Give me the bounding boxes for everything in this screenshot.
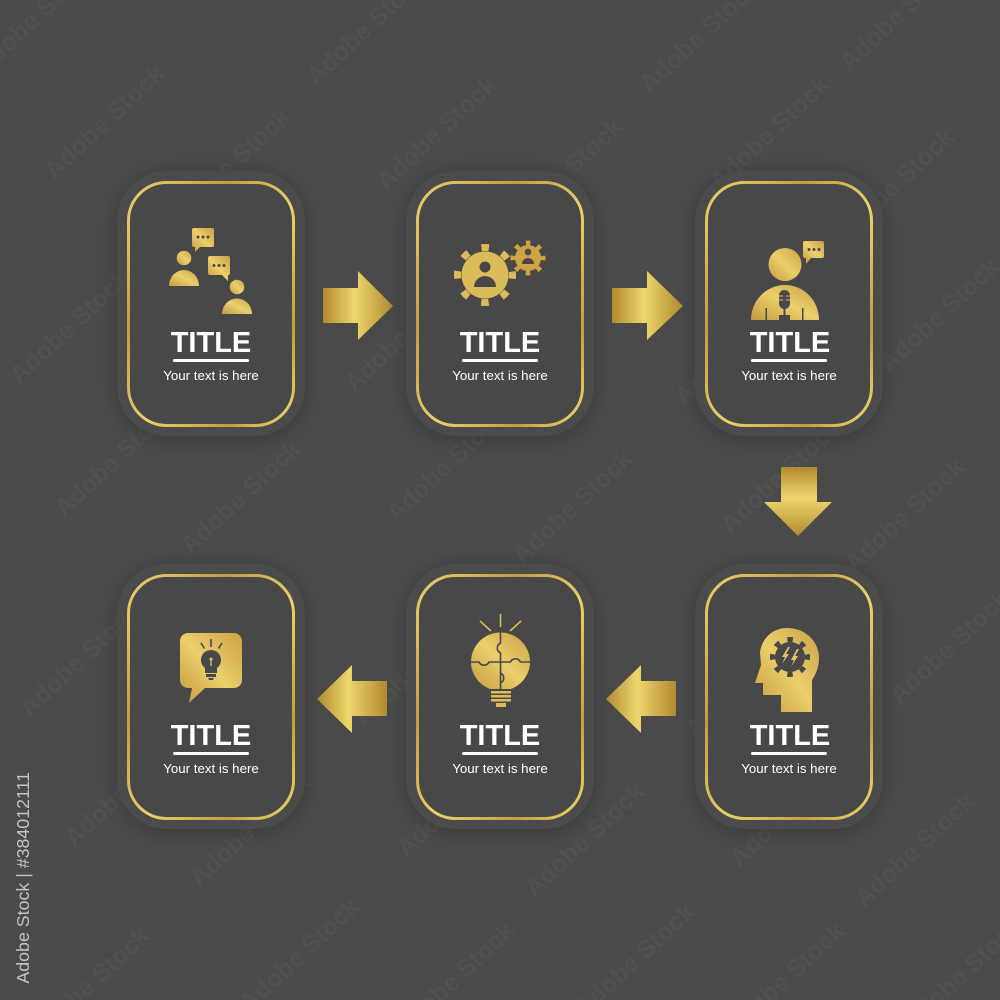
card 5 text: Your text is here	[452, 761, 548, 776]
card 2 outer panel	[406, 171, 594, 436]
card 4 text: Your text is here	[741, 761, 837, 776]
card 1 shadow	[115, 171, 307, 442]
watermark pattern: Adobe Stock	[339, 273, 470, 397]
card 2 shadow	[404, 171, 596, 442]
card 1: conversation	[115, 171, 307, 442]
watermark pattern: Adobe Stock	[497, 113, 628, 237]
card 5 title: TITLE	[460, 720, 540, 752]
watermark pattern: Adobe Stock	[4, 265, 135, 389]
card 6 outer panel	[117, 564, 305, 829]
card 5 shadow	[404, 564, 596, 835]
watermark pattern: Adobe Stock	[349, 608, 480, 732]
card 3 underline	[751, 359, 827, 362]
card 3 outer panel	[695, 171, 883, 436]
watermark pattern: Adobe Stock	[669, 286, 800, 410]
card 3 shadow	[693, 171, 885, 442]
watermark pattern: Adobe Stock	[49, 398, 180, 522]
icon: puzzle light bulb	[471, 614, 530, 707]
card 1 title: TITLE	[171, 327, 251, 359]
watermark pattern: Adobe Stock	[704, 71, 835, 195]
card 6 shadow	[115, 564, 307, 835]
card 1 gold frame	[128, 182, 294, 426]
card 2: team gears	[404, 171, 596, 442]
card 3: speaker	[693, 171, 885, 442]
watermark pattern: Adobe Stock	[371, 71, 502, 195]
card 5 underline	[462, 752, 538, 755]
arrow: left 1	[317, 665, 387, 733]
watermark pattern: Adobe Stock	[184, 768, 315, 892]
card 1 text: Your text is here	[163, 368, 259, 383]
watermark pattern: Adobe Stock	[39, 60, 170, 184]
card 4 gold frame	[706, 576, 872, 818]
watermark pattern: Adobe Stock	[849, 788, 980, 912]
card 5: puzzle bulb	[404, 564, 596, 835]
icon: people in gears	[458, 243, 543, 302]
card 6 title: TITLE	[171, 720, 251, 752]
card 4: head with gear	[693, 564, 885, 835]
card 3 text: Your text is here	[741, 368, 837, 383]
card 4 title: TITLE	[750, 720, 830, 752]
card 2 title: TITLE	[460, 327, 540, 359]
watermark pattern: Adobe Stock	[391, 738, 522, 862]
card 1 outer panel	[117, 171, 305, 436]
card 4 underline	[751, 752, 827, 755]
watermark pattern: Adobe Stock	[175, 435, 306, 559]
card 6 text: Your text is here	[163, 761, 259, 776]
watermark pattern: Adobe Stock	[14, 598, 145, 722]
card 1 underline	[173, 359, 249, 362]
watermark pattern: Adobe Stock	[507, 445, 638, 569]
watermark pattern: Adobe Stock	[519, 778, 650, 902]
stock id vertical text: Adobe Stock | #384012111	[13, 772, 33, 984]
icon: speaker with microphone	[751, 241, 824, 320]
card 6 gold frame	[128, 576, 294, 818]
card 2 gold frame	[418, 182, 582, 426]
card 5 gold frame	[418, 576, 582, 818]
card 6 underline	[173, 752, 249, 755]
card 5 outer panel	[406, 564, 594, 829]
card 4 outer panel	[695, 564, 883, 829]
arrow: down	[764, 467, 832, 536]
icon: head with gear and lightning	[755, 628, 819, 712]
card 3 title: TITLE	[750, 327, 830, 359]
watermark pattern: Adobe Stock	[59, 728, 190, 852]
watermark pattern: Adobe Stock	[724, 748, 855, 872]
icon: two people talking	[169, 228, 252, 314]
arrow: left 2	[606, 665, 676, 733]
watermark pattern: Adobe Stock	[679, 618, 810, 742]
watermark pattern: Adobe Stock	[381, 403, 512, 527]
watermark pattern: Adobe Stock	[715, 414, 846, 538]
arrow: right 2	[612, 271, 683, 340]
arrow: right 1	[323, 271, 393, 340]
card 2 underline	[462, 359, 538, 362]
watermark pattern: Adobe Stock	[165, 103, 296, 227]
icon: speech bubble with bulb	[180, 633, 242, 703]
card 6: idea bubble	[115, 564, 307, 835]
card 4 shadow	[693, 564, 885, 835]
watermark pattern: Adobe Stock	[829, 123, 960, 247]
watermark pattern: Adobe Stock	[839, 453, 970, 577]
card 3 gold frame	[706, 182, 872, 426]
card 2 text: Your text is here	[452, 368, 548, 383]
